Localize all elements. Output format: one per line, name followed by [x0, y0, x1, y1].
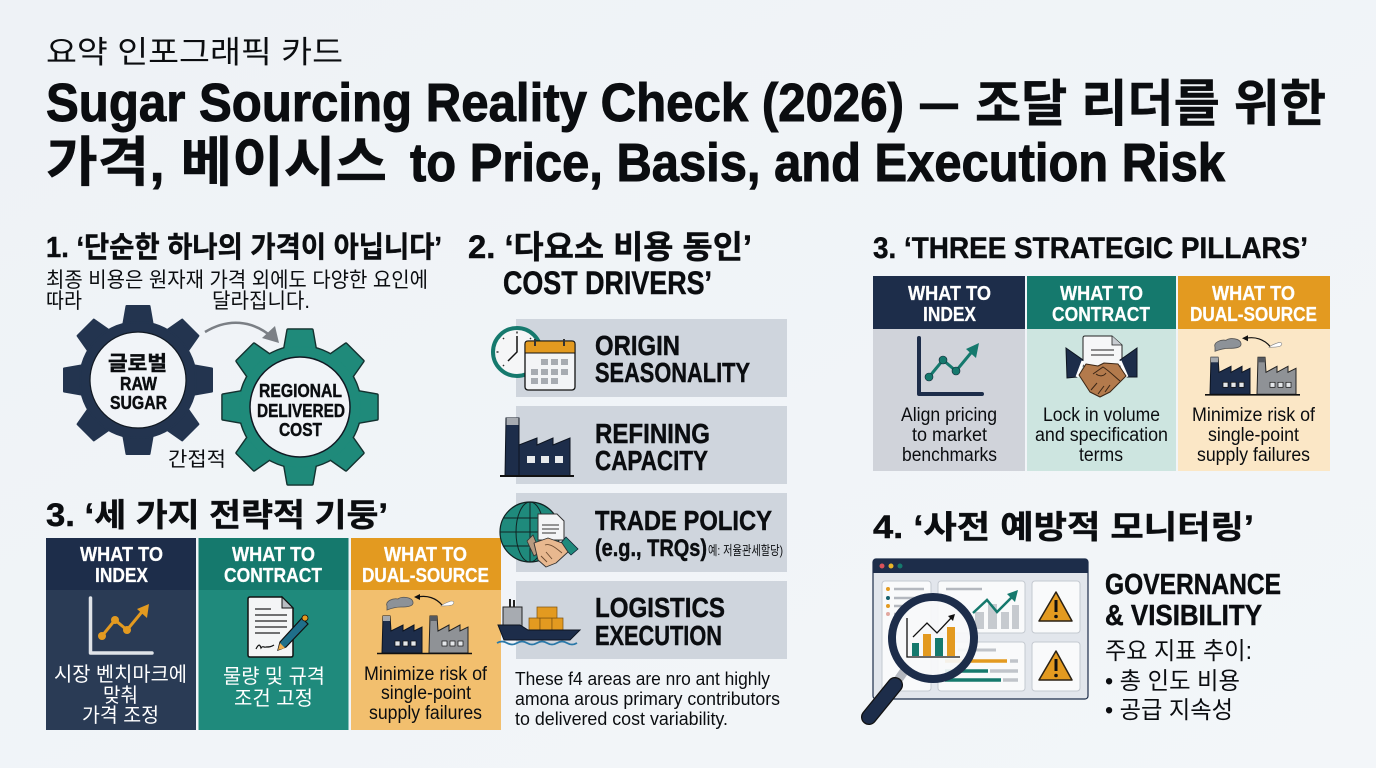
text block: cost drivers note	[515, 669, 780, 729]
text block: section 1 description	[46, 269, 428, 313]
row: trade policy: TRADE POLICY	[595, 505, 772, 536]
panel: section 4 proactive monitoring	[869, 509, 1281, 724]
column: what to contract: CONTRACT	[224, 565, 322, 587]
column: what to index: WHAT TO	[80, 544, 163, 566]
column: what to dual-source: supply failures	[1197, 445, 1310, 466]
row: refining capacity: REFINING	[595, 418, 710, 449]
row: logistics execution: LOGISTICS	[595, 592, 725, 623]
row: origin seasonality	[493, 319, 787, 397]
icon: navy gear global raw sugar: RAW	[120, 374, 157, 394]
row: logistics execution: EXECUTION	[595, 620, 722, 651]
icon: signed document	[248, 597, 308, 657]
text block: governance and visibility: GOVERNANCE	[1105, 569, 1281, 601]
row: trade policy: 예: 저율관세할당)	[708, 543, 783, 558]
icon: factory	[500, 418, 574, 476]
text block: cost drivers note: to delivered cost variability.	[515, 709, 728, 729]
row: logistics execution	[497, 581, 787, 659]
icon: teal gear regional delivered cost	[223, 330, 377, 484]
column: what to index: Align pricing	[901, 405, 997, 426]
column: what to contract: CONTRACT	[1052, 304, 1150, 326]
column: what to dual-source: Minimize risk of	[364, 664, 488, 685]
column: what to contract: 물량 및 규격	[223, 665, 325, 688]
icon: navy gear global raw sugar: 글로벌	[108, 352, 167, 375]
column: what to index: to market	[912, 425, 988, 446]
eyebrow label: 요약 인포그래픽 카드	[46, 35, 343, 70]
icon: navy gear global raw sugar: SUGAR	[110, 393, 167, 413]
column: what to index: 가격 조정	[82, 704, 159, 727]
column: what to contract: 조건 고정	[234, 687, 313, 710]
arrow: raw sugar to delivered cost	[205, 323, 279, 343]
column: what to contract: Lock in volume	[1043, 405, 1160, 426]
heading: cost drivers	[468, 229, 752, 301]
column: what to index: 맞춰	[103, 684, 138, 707]
column: what to dual-source	[351, 538, 501, 730]
column: what to dual-source: single-point	[1208, 425, 1300, 446]
text block: governance and visibility	[1105, 569, 1281, 724]
text block: governance and visibility: • 공급 지속성	[1105, 697, 1233, 724]
column: what to index	[873, 276, 1025, 471]
title	[46, 73, 1326, 193]
heading: proactive monitoring: 4. ‘사전 예방적 모니터링’	[873, 509, 1254, 545]
column: what to index: benchmarks	[902, 445, 997, 466]
row: trade policy	[500, 493, 787, 572]
column: what to index: 시장 벤치마크에	[54, 663, 187, 686]
column: what to index: WHAT TO	[908, 283, 991, 305]
icon: navy gear global raw sugar	[64, 306, 212, 454]
heading: three strategic pillars: 3. ‘THREE STRATEGIC PILLARS’	[873, 232, 1308, 265]
column: what to contract: WHAT TO	[232, 544, 315, 566]
text block: section 1 description: 달라집니다.	[212, 290, 310, 313]
text block: governance and visibility: 주요 지표 추이:	[1105, 638, 1252, 665]
column: what to index	[46, 538, 196, 730]
heading: three pillars korean: 3. ‘세 가지 전략적 기둥’	[46, 497, 388, 533]
icon: two factories	[377, 594, 472, 654]
icon: orange line chart	[90, 598, 152, 653]
row: origin seasonality: SEASONALITY	[595, 357, 750, 388]
column: what to contract	[198, 538, 348, 730]
text block: section 1 description: 최종 비용은 원자재 가격 외에도 다양한 요인에	[46, 269, 428, 292]
column: what to contract: terms	[1079, 445, 1123, 466]
row: trade policy: (e.g., TRQs)	[595, 535, 707, 562]
column: what to dual-source: DUAL-SOURCE	[362, 565, 489, 587]
panel: section 3 english pillars	[873, 232, 1330, 471]
icon: handshake and contract	[1066, 336, 1137, 397]
icon: container ship	[497, 599, 580, 644]
column: what to dual-source: single-point	[381, 683, 472, 704]
heading: cost drivers: 2. ‘다요소 비용 동인’	[468, 229, 752, 265]
column: what to index: INDEX	[923, 304, 977, 326]
icon: globe with handshake	[500, 502, 578, 567]
panel: section 3 korean pillars	[46, 497, 501, 730]
icon: teal gear regional delivered cost: COST	[279, 420, 322, 440]
icon: dashboard with magnifier	[869, 559, 1088, 717]
column: what to dual-source: WHAT TO	[384, 544, 467, 566]
column: what to dual-source: DUAL-SOURCE	[1190, 304, 1317, 326]
column: what to dual-source: Minimize risk of	[1192, 405, 1316, 426]
text block: section 1 description: 따라	[46, 290, 82, 313]
column: what to contract	[1027, 276, 1176, 471]
text block: cost drivers note: amona arous primary contributors	[515, 689, 780, 709]
row: refining capacity: CAPACITY	[595, 445, 708, 476]
title: —	[920, 73, 958, 133]
icon: clock and calendar	[493, 328, 575, 390]
column: what to dual-source: supply failures	[369, 703, 482, 724]
panel: section 1 not a single price	[46, 231, 442, 484]
icon: two factories	[1205, 335, 1300, 395]
title: 가격, 베이시스	[46, 133, 387, 193]
column: what to dual-source	[1178, 276, 1330, 471]
row: origin seasonality: ORIGIN	[595, 330, 680, 361]
heading: cost drivers: COST DRIVERS’	[503, 265, 712, 301]
text block: cost drivers note: These f4 areas are nro ant highly	[515, 669, 770, 689]
icon: teal gear regional delivered cost: DELIVERED	[257, 401, 345, 421]
text block: governance and visibility: • 총 인도 비용	[1105, 668, 1240, 695]
title: to Price, Basis, and Execution Risk	[410, 133, 1226, 193]
icon: teal line chart	[919, 338, 982, 394]
label: indirect: 간접적	[168, 448, 226, 471]
column: what to contract: WHAT TO	[1060, 283, 1143, 305]
panel: section 2 cost drivers	[468, 229, 787, 729]
title: 조달 리더를 위한	[975, 76, 1326, 132]
heading: section 1: 1. ‘단순한 하나의 가격이 아닙니다’	[46, 231, 442, 264]
row: refining capacity	[500, 406, 787, 484]
column: what to index: INDEX	[95, 565, 149, 587]
title: Sugar Sourcing Reality Check (2026)	[46, 73, 904, 133]
column: what to dual-source: WHAT TO	[1212, 283, 1295, 305]
text block: governance and visibility: & VISIBILITY	[1105, 600, 1262, 632]
icon: teal gear regional delivered cost: REGIONAL	[259, 381, 342, 401]
column: what to contract: and specification	[1035, 425, 1168, 446]
